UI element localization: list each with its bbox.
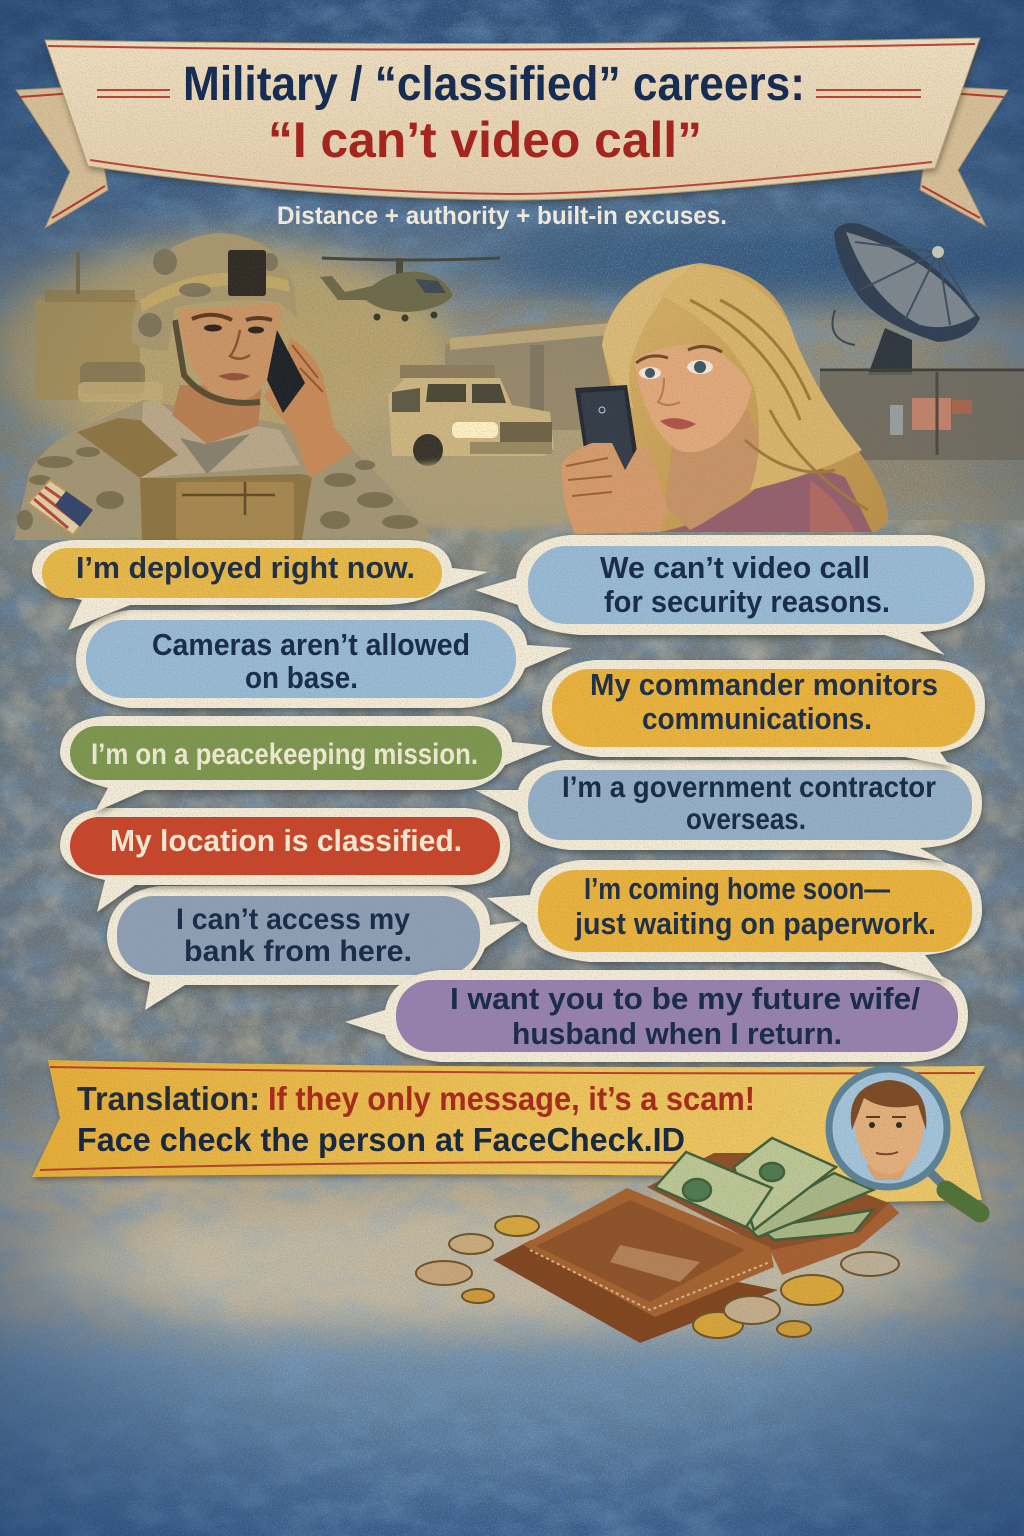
- illustration: wallet with cash and coins: [416, 1138, 899, 1343]
- neck: [172, 385, 262, 444]
- left ribbon tail: [16, 86, 108, 228]
- speech bubble: coming home: just waiting on paperwork.: [574, 906, 936, 941]
- chain link fence: [820, 370, 1024, 460]
- title banner: [16, 38, 1008, 228]
- wallet top flap: [523, 1188, 774, 1317]
- phone: [575, 385, 642, 490]
- speech bubble: location classified: My location is classified.: [110, 823, 462, 858]
- subtitle: Distance + authority + built-in excuses.: [277, 202, 727, 230]
- speech bubble: future spouse: [345, 970, 968, 1062]
- speech bubble: cameras: Cameras aren’t allowed: [152, 627, 470, 662]
- main ribbon: [45, 38, 980, 200]
- speech bubble: peacekeeping: I’m on a peacekeeping mission.: [91, 738, 478, 771]
- title line 1: Military / “classified” careers:: [183, 58, 805, 111]
- building center: [445, 320, 625, 430]
- hair strands: [602, 264, 695, 410]
- tactical vest: [77, 418, 312, 540]
- speech bubble: commander: My commander monitors: [590, 667, 938, 702]
- phone and hand: [264, 337, 354, 478]
- translation line 1: Translation:: [77, 1080, 260, 1117]
- top: [660, 463, 872, 532]
- title line 2: “I can’t video call”: [268, 112, 702, 168]
- speech bubble: future spouse: I want you to be my future wife/: [450, 981, 920, 1016]
- collar and t-shirt: [140, 400, 300, 478]
- speech bubble: security reasons: [475, 535, 985, 655]
- scene: military base background: [35, 223, 1024, 529]
- hair back: [602, 263, 888, 532]
- coins: [416, 1216, 899, 1338]
- speech bubble: cameras: on base.: [245, 660, 358, 695]
- right ribbon tail: [920, 86, 1008, 226]
- illustration: worried woman with phone: [562, 263, 888, 534]
- speech bubble: coming home: [487, 860, 982, 980]
- helicopter: [320, 258, 500, 322]
- speech bubble: security reasons: for security reasons.: [604, 584, 890, 619]
- translation banner: [32, 1060, 985, 1202]
- speech bubble: deployed: [32, 540, 488, 630]
- speech bubble: bank access: I can’t access my: [176, 903, 410, 936]
- face: [634, 345, 752, 452]
- speech bubble: contractor: I’m a government contractor: [562, 771, 936, 804]
- speech bubble: peacekeeping: [60, 716, 552, 812]
- helmet: [132, 233, 297, 350]
- buildings left: [35, 252, 163, 402]
- neck: [665, 410, 770, 530]
- wallet back: [647, 1153, 899, 1273]
- cash: [655, 1138, 873, 1240]
- speech bubble: deployed: I’m deployed right now.: [76, 550, 415, 585]
- speech bubble: cameras: [76, 610, 572, 708]
- wallet lower layer: [493, 1240, 778, 1343]
- flag patch: [28, 480, 93, 535]
- uniform: [14, 400, 430, 540]
- hand: [562, 443, 668, 534]
- ground: [330, 461, 630, 529]
- speech bubble: coming home: I’m coming home soon—: [584, 871, 890, 906]
- speech bubble: security reasons: We can’t video call: [600, 550, 870, 585]
- speech bubble: location classified: [60, 808, 510, 912]
- translation line 2: Face check the person at FaceCheck.ID: [77, 1121, 685, 1158]
- illustration: soldier on phone: [14, 233, 430, 540]
- icon: magnifying glass with face: [829, 1069, 980, 1213]
- speech bubble: bank access: [107, 886, 525, 1010]
- satellite dish: [832, 223, 980, 375]
- speech bubble: contractor: [475, 760, 982, 862]
- warning text: If they only message, it’s a scam!: [268, 1080, 755, 1117]
- speech bubble: future spouse: husband when I return.: [512, 1016, 842, 1051]
- speech bubble: bank access: bank from here.: [184, 935, 412, 968]
- face: [178, 303, 281, 403]
- speech bubble: contractor: overseas.: [686, 803, 806, 836]
- speech bubble: commander: [542, 660, 985, 766]
- speech bubble: commander: communications.: [642, 701, 872, 736]
- wallet right flap: [770, 1203, 899, 1275]
- chin strap: [175, 320, 260, 403]
- military vehicle: [388, 365, 554, 466]
